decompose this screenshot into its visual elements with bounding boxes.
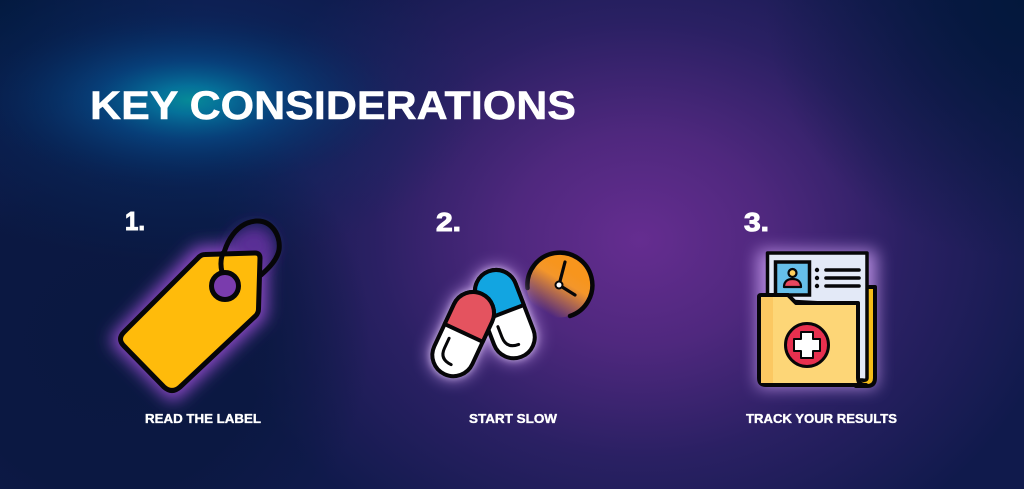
icon: capsules bbox=[425, 264, 541, 383]
caption 2: START SLOW bbox=[469, 412, 557, 426]
icon: price tag bbox=[120, 221, 279, 392]
folder front bbox=[759, 295, 866, 385]
number 1: 1. bbox=[125, 206, 145, 236]
caption 1: READ THE LABEL bbox=[145, 412, 261, 426]
item 3: track your results bbox=[744, 207, 897, 426]
icon: medical cross bbox=[786, 324, 828, 366]
item 1: read the label bbox=[120, 206, 279, 426]
red capsule bbox=[425, 285, 501, 383]
icon: person bbox=[784, 269, 801, 287]
title: KEY CONSIDERATIONS bbox=[90, 84, 576, 128]
caption 3: TRACK YOUR RESULTS bbox=[746, 412, 897, 426]
icon: clock bbox=[526, 252, 592, 318]
number 2: 2. bbox=[436, 207, 461, 237]
item 2: start slow bbox=[425, 207, 592, 426]
icon: medical folder bbox=[757, 250, 877, 388]
back cover bbox=[856, 287, 875, 386]
document bbox=[768, 253, 867, 380]
number 3: 3. bbox=[744, 207, 769, 237]
blue capsule bbox=[469, 264, 541, 364]
